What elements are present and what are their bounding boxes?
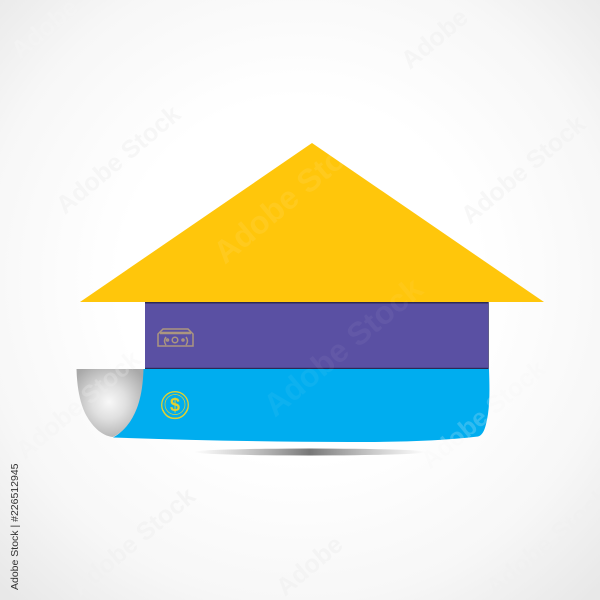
roof — [80, 143, 544, 302]
watermark text: Adobe Stock — [11, 345, 146, 465]
watermark text: Adobe — [271, 530, 349, 600]
watermark text: Adobe Stock — [256, 270, 429, 423]
stock id caption: Adobe Stock | #226512945 — [9, 463, 21, 590]
watermark text: Adobe — [396, 3, 474, 75]
watermark text: Adobe Stock — [416, 355, 551, 475]
watermark text: Adobe Stock — [51, 100, 186, 220]
icon: dollar coin — [162, 392, 188, 418]
ground shadow — [194, 448, 426, 456]
icon: dollar coin: $ — [170, 395, 180, 415]
panel: blue band — [113, 369, 489, 442]
watermark text: Adobe Stock — [456, 110, 591, 230]
icon: grey half bowl — [76, 369, 144, 437]
watermark text: Adobe Stock — [206, 117, 379, 270]
icon: banknote — [158, 329, 193, 346]
panel: purple band — [145, 302, 489, 370]
watermark text: Adobe Stock — [66, 482, 201, 600]
